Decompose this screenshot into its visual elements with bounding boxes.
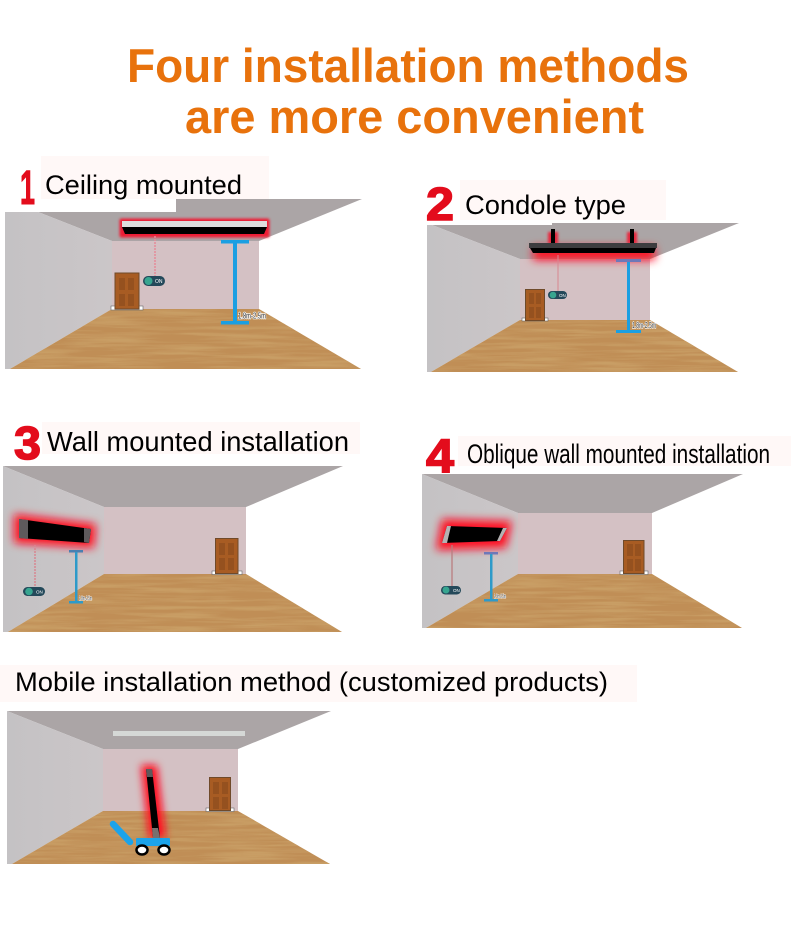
- switch: [548, 291, 567, 299]
- door: [212, 538, 242, 574]
- door: [522, 290, 548, 321]
- heater: [436, 519, 512, 550]
- mobile heater: [141, 765, 166, 838]
- remote signal line: [34, 545, 36, 587]
- label background: [0, 156, 269, 212]
- room: [427, 223, 739, 372]
- title: [127, 39, 689, 143]
- label background: [458, 436, 791, 466]
- switch: ON: [559, 293, 566, 298]
- switch: [143, 276, 165, 286]
- room: [3, 466, 343, 632]
- height marker: [221, 240, 266, 324]
- room: [7, 711, 331, 864]
- height marker: 1.8m-2.5m: [494, 594, 506, 600]
- heater: [529, 229, 657, 260]
- step number 2: 2: [426, 178, 454, 230]
- switch: [23, 587, 45, 596]
- step number 3: 3: [14, 417, 41, 469]
- height marker: 1.8m-2.5m: [79, 596, 92, 602]
- room: [422, 474, 743, 628]
- remote signal line: [451, 545, 453, 586]
- title: are more convenient: [185, 90, 644, 143]
- heading: Mobile installation method (customized products): [15, 667, 608, 697]
- remote signal line: [557, 255, 559, 291]
- heading: Condole type: [465, 190, 626, 220]
- panel: condole type: [426, 178, 739, 372]
- label background: [0, 665, 637, 702]
- height marker: [484, 552, 506, 602]
- door: [620, 540, 648, 574]
- step number 4: 4: [426, 429, 454, 482]
- door: [206, 778, 234, 812]
- height marker: [69, 550, 92, 604]
- switch: ON: [36, 590, 43, 594]
- label background: [427, 180, 666, 225]
- room: [5, 199, 362, 369]
- title: Four installation methods: [127, 39, 689, 92]
- height marker: 1.8m-2.5m: [238, 310, 266, 320]
- step number 1: 1: [20, 162, 35, 215]
- label background: [42, 422, 360, 454]
- ceiling light strip: [113, 731, 245, 736]
- height marker: 1.8m-2.5m: [632, 321, 656, 330]
- switch: ON: [453, 588, 460, 593]
- panel: wall mounted: [3, 417, 360, 632]
- heading: Wall mounted installation: [47, 426, 349, 457]
- switch: [441, 586, 461, 594]
- heading: Ceiling mounted: [45, 170, 242, 200]
- remote signal line: [154, 236, 156, 277]
- switch: ON: [155, 279, 163, 285]
- height marker: [616, 259, 656, 333]
- panel: mobile installation: [0, 665, 637, 864]
- panel: oblique wall mounted: [422, 429, 791, 628]
- cart: [113, 824, 170, 854]
- heater: [14, 514, 96, 548]
- door: [111, 273, 143, 310]
- panel: ceiling mounted: [0, 156, 362, 369]
- heater: [120, 218, 270, 238]
